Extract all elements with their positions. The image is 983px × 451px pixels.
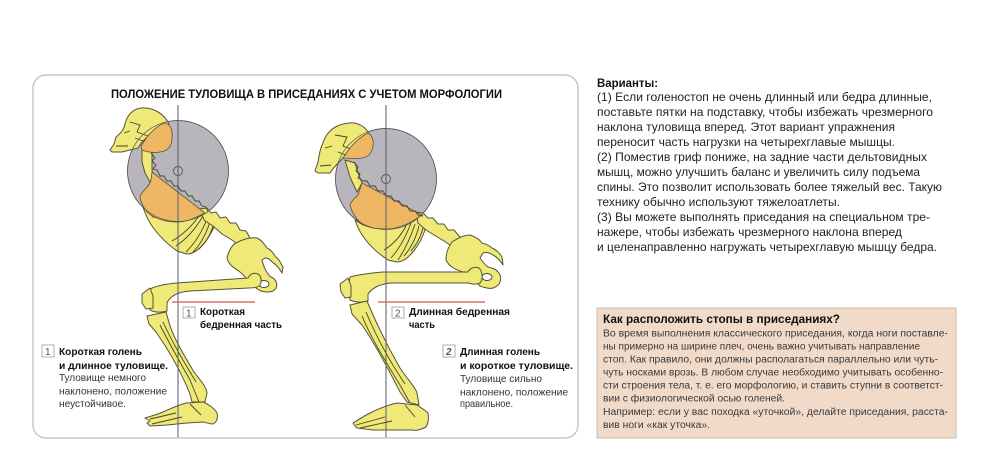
lower orange bbox=[140, 172, 205, 222]
skull details bbox=[320, 135, 351, 166]
skull bbox=[110, 108, 169, 152]
circle outline bbox=[128, 120, 228, 222]
load circle bbox=[336, 128, 436, 230]
label: short shin, long torso: Короткая голень bbox=[59, 347, 142, 358]
skull details bbox=[116, 122, 148, 146]
tibia inner lines bbox=[362, 312, 410, 403]
ribs bbox=[172, 216, 213, 252]
panel body: ны примерно на ширине плеч, очень важно учитывать направление bbox=[603, 342, 921, 352]
text block: variants: мышц, можно улучшить баланс и увеличить силу подъема bbox=[597, 165, 920, 179]
lumbar spine bbox=[416, 212, 463, 247]
panel body: Во время выполнения классического приседания, когда ноги поставле- bbox=[603, 328, 948, 340]
circle outline bbox=[336, 128, 436, 230]
patella bbox=[142, 288, 153, 309]
panel body bbox=[603, 328, 948, 431]
upper orange bbox=[141, 123, 172, 152]
neck bbox=[345, 160, 362, 192]
text block: variants: поставьте пятки на подставку, чтобы избежать чрезмерного bbox=[597, 105, 933, 119]
foot bbox=[353, 403, 428, 430]
label: short femur bbox=[183, 307, 282, 331]
vertical line bbox=[385, 105, 387, 437]
tibia bbox=[350, 301, 419, 405]
panel heading: Как расположить стопы в приседаниях? bbox=[603, 312, 840, 326]
panel body: стоп. Как правило, они должны располагаться параллельно или чуть- bbox=[603, 354, 938, 366]
label: short shin, long torso: наклонено, положение bbox=[59, 386, 167, 398]
panel body: сти строения тела, т. е. его морфологию, и ставить ступни в соответст- bbox=[603, 380, 943, 392]
patella bbox=[340, 278, 351, 298]
panel body: вии с физиологической осью голеней. bbox=[603, 394, 785, 404]
figure 2: skeleton long femur bbox=[315, 105, 503, 437]
text block: variants: и целенаправленно нагружать четырехглавую мышцу бедра. bbox=[597, 240, 937, 254]
femur red marker bbox=[172, 301, 255, 303]
vertical line bbox=[177, 105, 179, 437]
neck bbox=[142, 150, 153, 182]
label: long shin, short torso: и короткое туловище. bbox=[460, 361, 573, 372]
femur red marker bbox=[378, 301, 485, 303]
label: long shin, short torso: правильное. bbox=[460, 399, 513, 410]
text block: variants: (2) Поместив гриф пониже, на задние части дельтовидных bbox=[597, 150, 927, 164]
foot lines bbox=[150, 404, 201, 424]
text block: variants: наклона туловища вперед. Этот вариант упражнения bbox=[597, 120, 895, 134]
text block: variants: Варианты: bbox=[597, 78, 658, 90]
text block: variants: (3) Вы можете выполнять приседания на специальном тре- bbox=[597, 210, 930, 224]
text block: variants: спины. Это позволит использовать более тяжелый вес. Такую bbox=[597, 180, 942, 194]
text block: variants: (1) Если голеностоп не очень длинный или бедра длинные, bbox=[597, 90, 932, 104]
text block: variants: технику обычно используют тяжелоатлеты. bbox=[597, 195, 840, 209]
panel body: чуть носками врозь. В любом случае необходимо учитывать особенно- bbox=[603, 368, 943, 378]
pelvis bbox=[227, 238, 283, 292]
panel body: вив ноги «как уточка». bbox=[603, 420, 710, 431]
thoracic spine bbox=[151, 153, 208, 212]
centre mark bbox=[174, 166, 182, 176]
skull bbox=[315, 123, 369, 173]
ribs bbox=[384, 223, 423, 260]
centre mark bbox=[382, 174, 390, 184]
panel: foot placement bbox=[597, 308, 956, 438]
label: short femur: 1 bbox=[186, 308, 192, 320]
thoracic spine bbox=[354, 162, 423, 216]
label: long shin, short torso: Туловище сильно bbox=[460, 374, 542, 385]
label: long shin, short torso: 2 bbox=[445, 347, 452, 358]
label: long femur bbox=[392, 306, 510, 331]
label: short femur: Короткая bbox=[200, 307, 245, 318]
label: short femur: бедренная часть bbox=[200, 319, 282, 331]
lower orange bbox=[350, 183, 422, 229]
label: long shin, short torso: Длинная голень bbox=[460, 347, 540, 358]
upper orange bbox=[343, 133, 373, 158]
label: long shin, short torso: наклонено, положение bbox=[460, 388, 568, 398]
text block: variants: нажере, чтобы избежать чрезмерного наклона вперед bbox=[597, 225, 902, 239]
figure 1: skeleton short femur bbox=[110, 105, 283, 437]
label: short shin, long torso bbox=[42, 345, 168, 410]
tibia bbox=[147, 312, 207, 402]
label: long shin, short torso bbox=[443, 345, 573, 410]
label: short shin, long torso: неустойчивое. bbox=[59, 399, 126, 410]
foot lines bbox=[356, 405, 415, 428]
tibia inner lines bbox=[160, 322, 199, 402]
lumbar spine bbox=[200, 208, 250, 246]
text block: variants bbox=[597, 78, 942, 254]
label: long femur: часть bbox=[409, 320, 435, 331]
label: short shin, long torso: 1 bbox=[45, 347, 51, 358]
label: long femur: 2 bbox=[395, 308, 401, 320]
hip socket bbox=[482, 274, 492, 280]
panel body: Например: если у вас походка «уточкой», делайте приседания, расста- bbox=[603, 407, 948, 418]
hip socket bbox=[259, 280, 269, 288]
pelvis bbox=[446, 235, 503, 288]
femur bbox=[348, 267, 482, 302]
label: short shin, long torso: и длинное туловище. bbox=[59, 361, 168, 372]
foot bbox=[145, 402, 217, 426]
abdomen and rib cage bbox=[355, 216, 425, 262]
title: ПОЛОЖЕНИЕ ТУЛОВИЩА В ПРИСЕДАНИЯХ С УЧЕТОМ МОРФОЛОГИИ bbox=[111, 89, 502, 101]
label: long femur: Длинная бедренная bbox=[409, 306, 510, 318]
label: short shin, long torso: Туловище немного bbox=[59, 373, 146, 384]
panel: skeleton comparison bbox=[33, 75, 578, 438]
abdomen and rib cage bbox=[143, 207, 214, 254]
femur bbox=[148, 273, 261, 312]
text block: variants: переносит часть нагрузки на четырехглавые мышцы. bbox=[597, 135, 895, 149]
load circle bbox=[128, 120, 228, 222]
